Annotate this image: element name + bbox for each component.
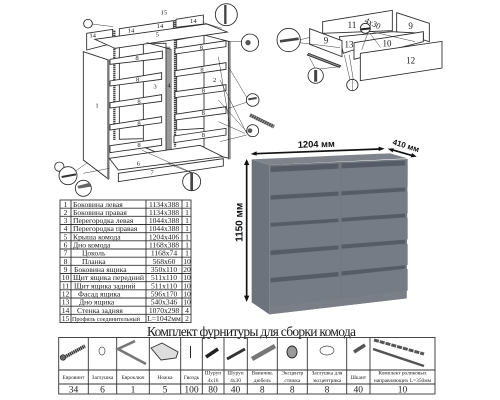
part sizes: 540x346 — [151, 298, 177, 307]
part numbers: 14 — [190, 18, 197, 25]
runner — [307, 53, 341, 67]
hardware names: 4x30 — [230, 378, 241, 384]
icon: nail — [190, 346, 192, 358]
hardware names: Шуруп — [227, 370, 244, 376]
drawer numbers: 9 — [324, 35, 329, 45]
hardware names: направляющих L=350мм — [374, 378, 432, 384]
hardware names: эксцентрика — [313, 378, 342, 384]
part numbers: 14 — [89, 33, 97, 40]
part quantities: 1 — [185, 240, 189, 250]
panel: side 2 — [227, 42, 230, 159]
icon: screw detail — [277, 28, 300, 52]
part sizes: 1044x388 — [149, 224, 179, 233]
part numbers: 4 — [167, 82, 171, 89]
hardware quantities — [69, 386, 408, 396]
icon: eccentric cap — [320, 346, 334, 355]
panel: plinth 7 — [118, 159, 223, 182]
row numbers: 6 — [64, 240, 68, 250]
icon: pin detail — [347, 79, 358, 91]
part quantities — [183, 200, 191, 323]
hardware names: Ножка — [157, 375, 173, 381]
hardware names: дюбель — [254, 377, 271, 384]
drawer numbers: 4x30 — [363, 16, 382, 31]
hardware names: Евроключ — [121, 375, 145, 381]
part numbers: 8 — [136, 77, 140, 84]
row numbers: 5 — [64, 232, 68, 241]
row numbers — [62, 200, 70, 323]
part quantities: 2 — [185, 314, 189, 323]
part sizes: 568x60 — [153, 257, 176, 266]
part sizes: 1168x74 — [151, 249, 177, 258]
part numbers: 8 — [200, 66, 204, 73]
part numbers: 5 — [156, 32, 160, 39]
icon: screw 4x30 — [360, 23, 370, 33]
part names: Боковина ящика — [74, 265, 127, 274]
part quantities: 1 — [185, 232, 189, 241]
part numbers: 1 — [95, 103, 99, 110]
icon: dowel — [354, 345, 365, 352]
drawer numbers — [324, 16, 415, 66]
hardware quantities: 40 — [354, 386, 363, 396]
part sizes: 596x170 — [151, 290, 177, 298]
hardware quantities: 8 — [325, 386, 330, 396]
part quantities: 1 — [185, 208, 189, 217]
part numbers: 8 — [137, 98, 141, 105]
part numbers: 3 — [153, 83, 157, 90]
hardware quantities: 10 — [398, 386, 408, 396]
part quantities: 10 — [183, 257, 191, 266]
row numbers: 9 — [64, 265, 68, 274]
part names: Щит ящика задний — [74, 281, 136, 290]
hardware quantities: 8 — [290, 386, 295, 396]
chest body — [252, 153, 408, 314]
part numbers: 14 — [128, 28, 135, 35]
drawer numbers: 12 — [406, 56, 415, 66]
panel: divider 4 — [163, 47, 174, 158]
part names: Крыша комода — [73, 232, 121, 241]
part sizes: 350x110 — [151, 265, 177, 274]
part numbers — [89, 10, 216, 177]
icon: cap — [99, 347, 105, 355]
part sizes: 1044x388 — [149, 216, 179, 225]
hardware names: 4x16 — [208, 378, 219, 384]
parts table — [60, 200, 191, 323]
row numbers: 13 — [62, 298, 70, 307]
part quantities: 10 — [183, 281, 191, 290]
icon: euro key — [118, 341, 146, 364]
drawer numbers: 10 — [383, 39, 392, 49]
part quantities: 1 — [185, 249, 189, 258]
hardware quantities: 100 — [184, 386, 199, 396]
hardware names — [63, 370, 432, 384]
icon: screw 4x30 — [227, 349, 245, 359]
panel: bottom 6 — [109, 145, 223, 170]
drawer numbers: 11 — [348, 20, 356, 30]
part names — [72, 200, 144, 323]
row numbers: 11 — [62, 281, 69, 290]
hardware quantities: 8 — [260, 386, 265, 396]
part quantities: 10 — [183, 298, 191, 307]
part names: Дно ящика — [79, 298, 115, 307]
hardware quantities: 1 — [131, 386, 136, 396]
table grid — [59, 338, 435, 394]
planks 8 left — [110, 51, 162, 153]
product photo: grey chest of drawers with dimensions — [234, 138, 420, 314]
height label: 1150 мм — [234, 203, 245, 242]
part numbers: 8 — [135, 55, 139, 62]
part sizes — [147, 200, 181, 323]
drawer numbers: 9 — [408, 21, 413, 31]
exploded carcass assembly diagram — [55, 4, 274, 196]
part names: Перегородка левая — [73, 216, 134, 225]
icon: roller runners — [373, 340, 424, 366]
row numbers: 15 — [62, 314, 70, 323]
part sizes: 1134x388 — [149, 208, 179, 217]
hardware names: стяжка — [284, 378, 301, 384]
icon: detail circles — [55, 4, 274, 196]
part numbers: 8 — [202, 110, 206, 117]
icon: furniture leg — [151, 343, 178, 360]
panel: bottom 13 — [339, 32, 423, 53]
hardware names: Евровинт — [63, 375, 85, 381]
panel: back 11 — [323, 10, 392, 33]
part numbers: 6 — [137, 160, 141, 167]
part names: Боковина правая — [73, 208, 127, 217]
part numbers: 8 — [137, 142, 141, 149]
row numbers: 8 — [64, 257, 68, 266]
drawer numbers: 13 — [345, 39, 354, 49]
row numbers: 3 — [64, 216, 68, 225]
part numbers: 8 — [202, 88, 206, 95]
hardware names: Шуруп — [205, 370, 221, 376]
width label: 1204 мм — [298, 139, 335, 150]
part sizes: 511x110 — [151, 273, 177, 282]
drawer fronts — [270, 166, 408, 306]
part names: Профиль соединительный — [72, 316, 141, 323]
hardware names: Заглушка для — [312, 370, 343, 376]
hardware names: Ввинчив. — [252, 370, 273, 376]
part sizes: 1070x298 — [149, 306, 179, 315]
part names: Планка — [82, 257, 106, 266]
part quantities: 1 — [185, 224, 189, 233]
part names: Фасад ящика — [78, 290, 121, 298]
hardware names: Комплект роликовых — [378, 370, 427, 376]
part names: Перегородка правая — [73, 224, 138, 233]
part sizes: L=1042мм — [147, 314, 181, 323]
part names: Дно комода — [73, 240, 111, 250]
part names: Стенка задняя — [77, 306, 123, 315]
part numbers: 7 — [150, 170, 154, 177]
icon: euroscrew — [60, 346, 85, 360]
table grid — [60, 200, 191, 322]
row numbers: 14 — [62, 306, 70, 315]
panel: back walls and connector — [87, 15, 230, 158]
part names: Цоколь — [82, 249, 106, 258]
part numbers: 8 — [202, 132, 206, 139]
part quantities: 10 — [183, 273, 191, 282]
part numbers: 15 — [161, 10, 168, 17]
part sizes: 1134x388 — [149, 200, 179, 209]
part sizes: 1204x406 — [149, 232, 179, 241]
leader lines — [70, 23, 248, 175]
part numbers: 14 — [157, 23, 164, 30]
leader lines — [299, 32, 415, 80]
depth label: 410 мм — [392, 138, 420, 154]
panel: top 5 — [95, 24, 227, 48]
part numbers: 8 — [200, 44, 204, 51]
row numbers: 7 — [64, 249, 68, 258]
part sizes: 511x110 — [151, 281, 177, 290]
part quantities: 10 — [183, 290, 191, 298]
panel: side 1 — [83, 52, 108, 179]
hardware names: Заглушка — [92, 375, 114, 381]
hardware names: Шкант — [350, 375, 367, 381]
part quantities: 20 — [183, 265, 191, 274]
icon: pin with dowel — [252, 346, 275, 359]
drawer gap shadows — [271, 161, 405, 282]
hardware names: Эксцентр — [281, 370, 303, 376]
hardware quantities: 80 — [208, 386, 218, 396]
part numbers: 8 — [137, 120, 141, 127]
hardware table — [59, 338, 435, 396]
exploded drawer diagram — [277, 10, 442, 91]
planks 8 right — [174, 41, 226, 143]
part numbers: 2 — [213, 77, 216, 84]
panel: facade 12 — [360, 41, 442, 81]
part names: Щит ящика передний — [73, 273, 144, 282]
hardware quantities: 6 — [100, 386, 105, 396]
dimension arrows — [244, 147, 417, 302]
row numbers: 2 — [64, 208, 68, 217]
hardware names: Гвоздь — [184, 375, 200, 381]
part names: Боковина левая — [73, 200, 123, 209]
part sizes: 1168x388 — [149, 240, 179, 250]
row numbers: 4 — [64, 224, 68, 233]
hardware quantities: 40 — [231, 386, 240, 396]
part quantities: 4 — [185, 306, 189, 315]
panel: side 9 right — [397, 13, 429, 42]
row numbers: 10 — [62, 273, 70, 282]
row numbers: 1 — [64, 200, 68, 209]
panel: front 10 — [354, 32, 423, 59]
panel: side 9 left — [310, 29, 342, 57]
part quantities: 1 — [185, 216, 189, 225]
icon: bolt detail — [308, 68, 323, 83]
icon: screw 4x16 — [206, 349, 218, 357]
hardware title: Комплект фурнитуры для сборки комода — [147, 324, 356, 339]
part quantities: 1 — [185, 200, 189, 209]
hardware quantities: 5 — [163, 386, 168, 396]
hardware quantities: 34 — [69, 386, 78, 396]
row numbers: 12 — [62, 290, 70, 298]
icon: eccentric — [287, 346, 297, 358]
